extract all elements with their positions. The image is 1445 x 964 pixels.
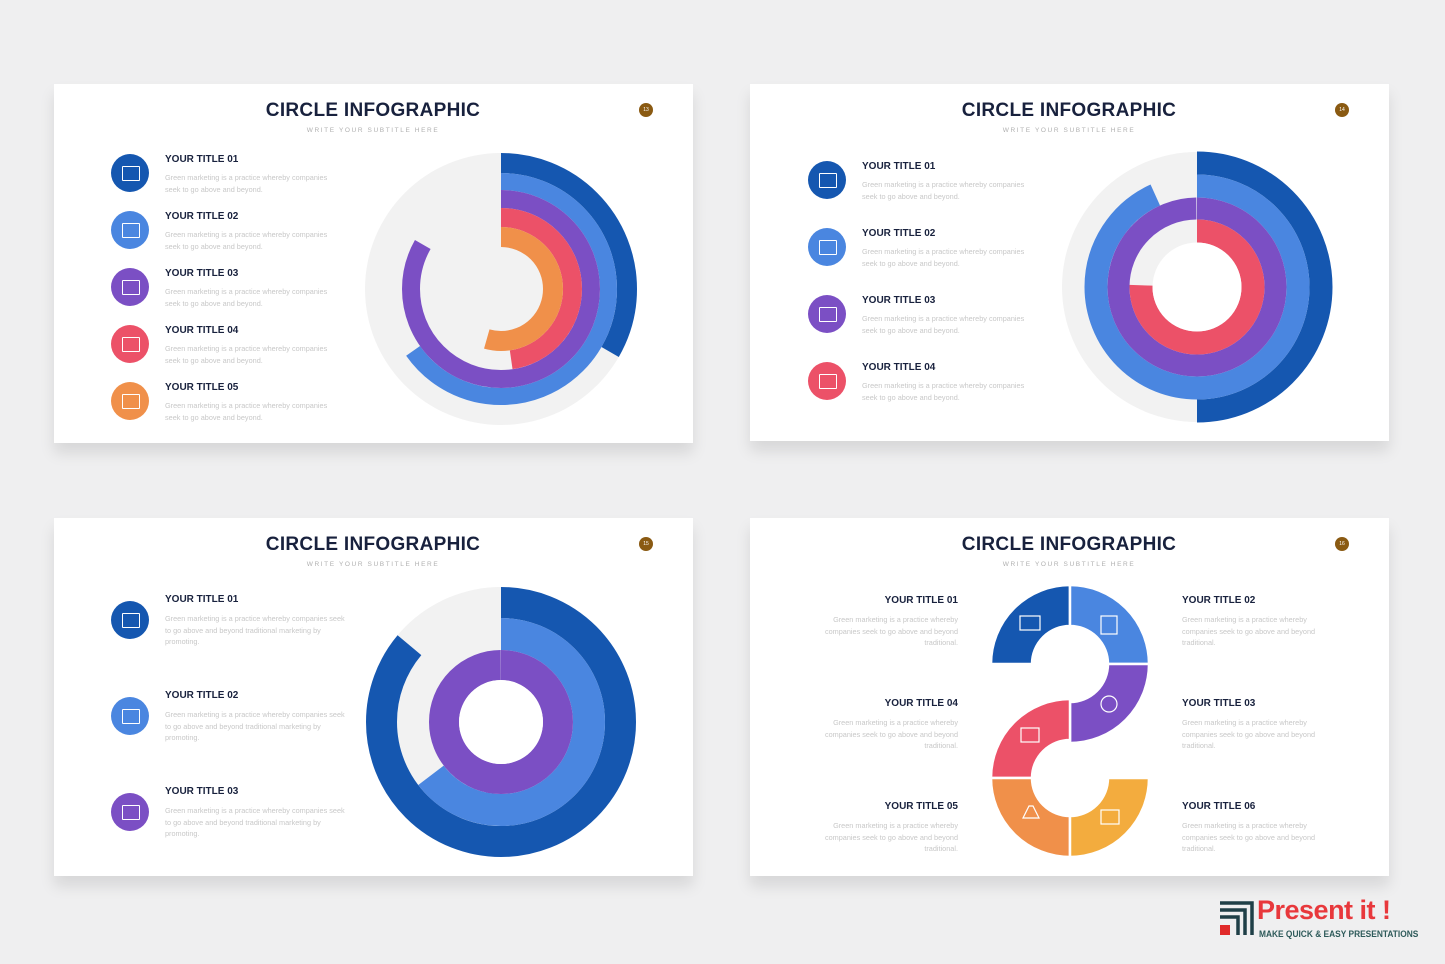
item 04: Green marketing is a practice whereby companies seek to go above and beyond traditional. [825, 718, 958, 750]
item 04: YOUR TITLE 04 [165, 325, 238, 336]
item 02 [111, 690, 345, 742]
logo icon [1220, 901, 1254, 935]
title slide 13: CIRCLE INFOGRAPHIC [266, 100, 480, 121]
item 03: Green marketing is a practice whereby companies seek to go above and beyond traditional marketing by promoting. [165, 806, 345, 838]
badge 13: 13 [643, 107, 649, 113]
item 06: Green marketing is a practice whereby companies seek to go above and beyond traditional. [1182, 821, 1315, 853]
right labels slide 16 [1182, 595, 1315, 853]
item 03: YOUR TITLE 03 [165, 786, 238, 797]
item 04 [111, 325, 327, 364]
item 04: YOUR TITLE 04 [862, 362, 935, 373]
subtitle slide 14: WRITE YOUR SUBTITLE HERE [1003, 127, 1135, 134]
badge 14 [1335, 103, 1349, 117]
title slide 16: CIRCLE INFOGRAPHIC [962, 534, 1176, 555]
item 06: YOUR TITLE 06 [1182, 801, 1255, 812]
item 01 [825, 595, 958, 647]
item 01: YOUR TITLE 01 [862, 161, 935, 172]
item 02: Green marketing is a practice whereby companies seek to go above and beyond. [165, 230, 327, 250]
card: slide 16 [750, 518, 1389, 876]
chart: radial bars slide 15 [366, 587, 636, 857]
item 02: YOUR TITLE 02 [1182, 595, 1255, 606]
item 05: Green marketing is a practice whereby companies seek to go above and beyond. [165, 401, 327, 422]
subtitle slide 16: WRITE YOUR SUBTITLE HERE [1003, 561, 1135, 568]
left labels slide 16 [825, 595, 958, 853]
item 04 [808, 362, 1024, 402]
chart: radial bars slide 13 [365, 153, 637, 425]
badge 15: 15 [643, 541, 649, 547]
item 01: YOUR TITLE 01 [165, 594, 238, 605]
title slide 14: CIRCLE INFOGRAPHIC [962, 100, 1176, 121]
item 05 [111, 382, 327, 422]
card: slide 15 [54, 518, 693, 876]
item 01 [111, 154, 327, 194]
logo: Present it [1220, 895, 1418, 940]
title slide 15: CIRCLE INFOGRAPHIC [266, 534, 480, 555]
item 05: Green marketing is a practice whereby companies seek to go above and beyond traditional. [825, 821, 958, 853]
card: slide 14 [750, 84, 1389, 441]
item 01: Green marketing is a practice whereby companies seek to go above and beyond. [862, 180, 1024, 200]
badge 16 [1335, 537, 1349, 551]
item 03: Green marketing is a practice whereby companies seek to go above and beyond. [165, 287, 327, 308]
chart: S-shape segments slide 16 [992, 586, 1148, 856]
item 01 [111, 594, 345, 646]
item 02: Green marketing is a practice whereby companies seek to go above and beyond traditional. [1182, 615, 1315, 647]
item 01 [808, 161, 1024, 200]
item 06 [1182, 801, 1315, 853]
chart: radial bars slide 14 [1062, 152, 1332, 422]
item 03: YOUR TITLE 03 [165, 268, 238, 279]
badge 13 [639, 103, 653, 117]
subtitle slide 15: WRITE YOUR SUBTITLE HERE [307, 561, 439, 568]
item 01: Green marketing is a practice whereby companies seek to go above and beyond. [165, 173, 327, 194]
item 03 [808, 295, 1024, 334]
item 04 [825, 698, 958, 750]
item 01: Green marketing is a practice whereby companies seek to go above and beyond traditional marketing by promoting. [165, 614, 345, 646]
item 03: Green marketing is a practice whereby companies seek to go above and beyond. [862, 314, 1024, 334]
item 02 [111, 211, 327, 250]
item 03: YOUR TITLE 03 [1182, 698, 1255, 709]
badge 14: 14 [1339, 107, 1345, 113]
item 03: Green marketing is a practice whereby companies seek to go above and beyond traditional. [1182, 718, 1315, 750]
item 02 [808, 228, 1024, 268]
logo text: Present it ! [1257, 895, 1391, 925]
logo: Present it: MAKE QUICK & EASY PRESENTATIONS [1259, 929, 1418, 940]
item 04: Green marketing is a practice whereby companies seek to go above and beyond. [862, 381, 1024, 402]
item 02: YOUR TITLE 02 [862, 228, 935, 239]
item 02: Green marketing is a practice whereby companies seek to go above and beyond traditional marketing by promoting. [165, 710, 345, 742]
list slide 13 [111, 154, 327, 422]
item 04: Green marketing is a practice whereby companies seek to go above and beyond. [165, 344, 327, 364]
item 02: YOUR TITLE 02 [165, 690, 238, 701]
item 01: YOUR TITLE 01 [165, 154, 238, 165]
list slide 15 [111, 594, 345, 838]
item 02: YOUR TITLE 02 [165, 211, 238, 222]
list slide 14 [808, 161, 1024, 402]
card: slide 13 [54, 84, 693, 443]
badge 15 [639, 537, 653, 551]
badge 16: 16 [1339, 541, 1345, 547]
item 02: Green marketing is a practice whereby companies seek to go above and beyond. [862, 247, 1024, 268]
item 03 [111, 268, 327, 308]
item 01: YOUR TITLE 01 [885, 595, 958, 606]
item 03 [1182, 698, 1315, 750]
item 05 [825, 801, 958, 853]
item 05: YOUR TITLE 05 [165, 382, 238, 393]
item 03 [111, 786, 345, 838]
item 03: YOUR TITLE 03 [862, 295, 935, 306]
item 05: YOUR TITLE 05 [885, 801, 958, 812]
item 04: YOUR TITLE 04 [885, 698, 958, 709]
subtitle slide 13: WRITE YOUR SUBTITLE HERE [307, 127, 439, 134]
item 01: Green marketing is a practice whereby companies seek to go above and beyond traditional. [825, 615, 958, 647]
item 02 [1182, 595, 1315, 647]
